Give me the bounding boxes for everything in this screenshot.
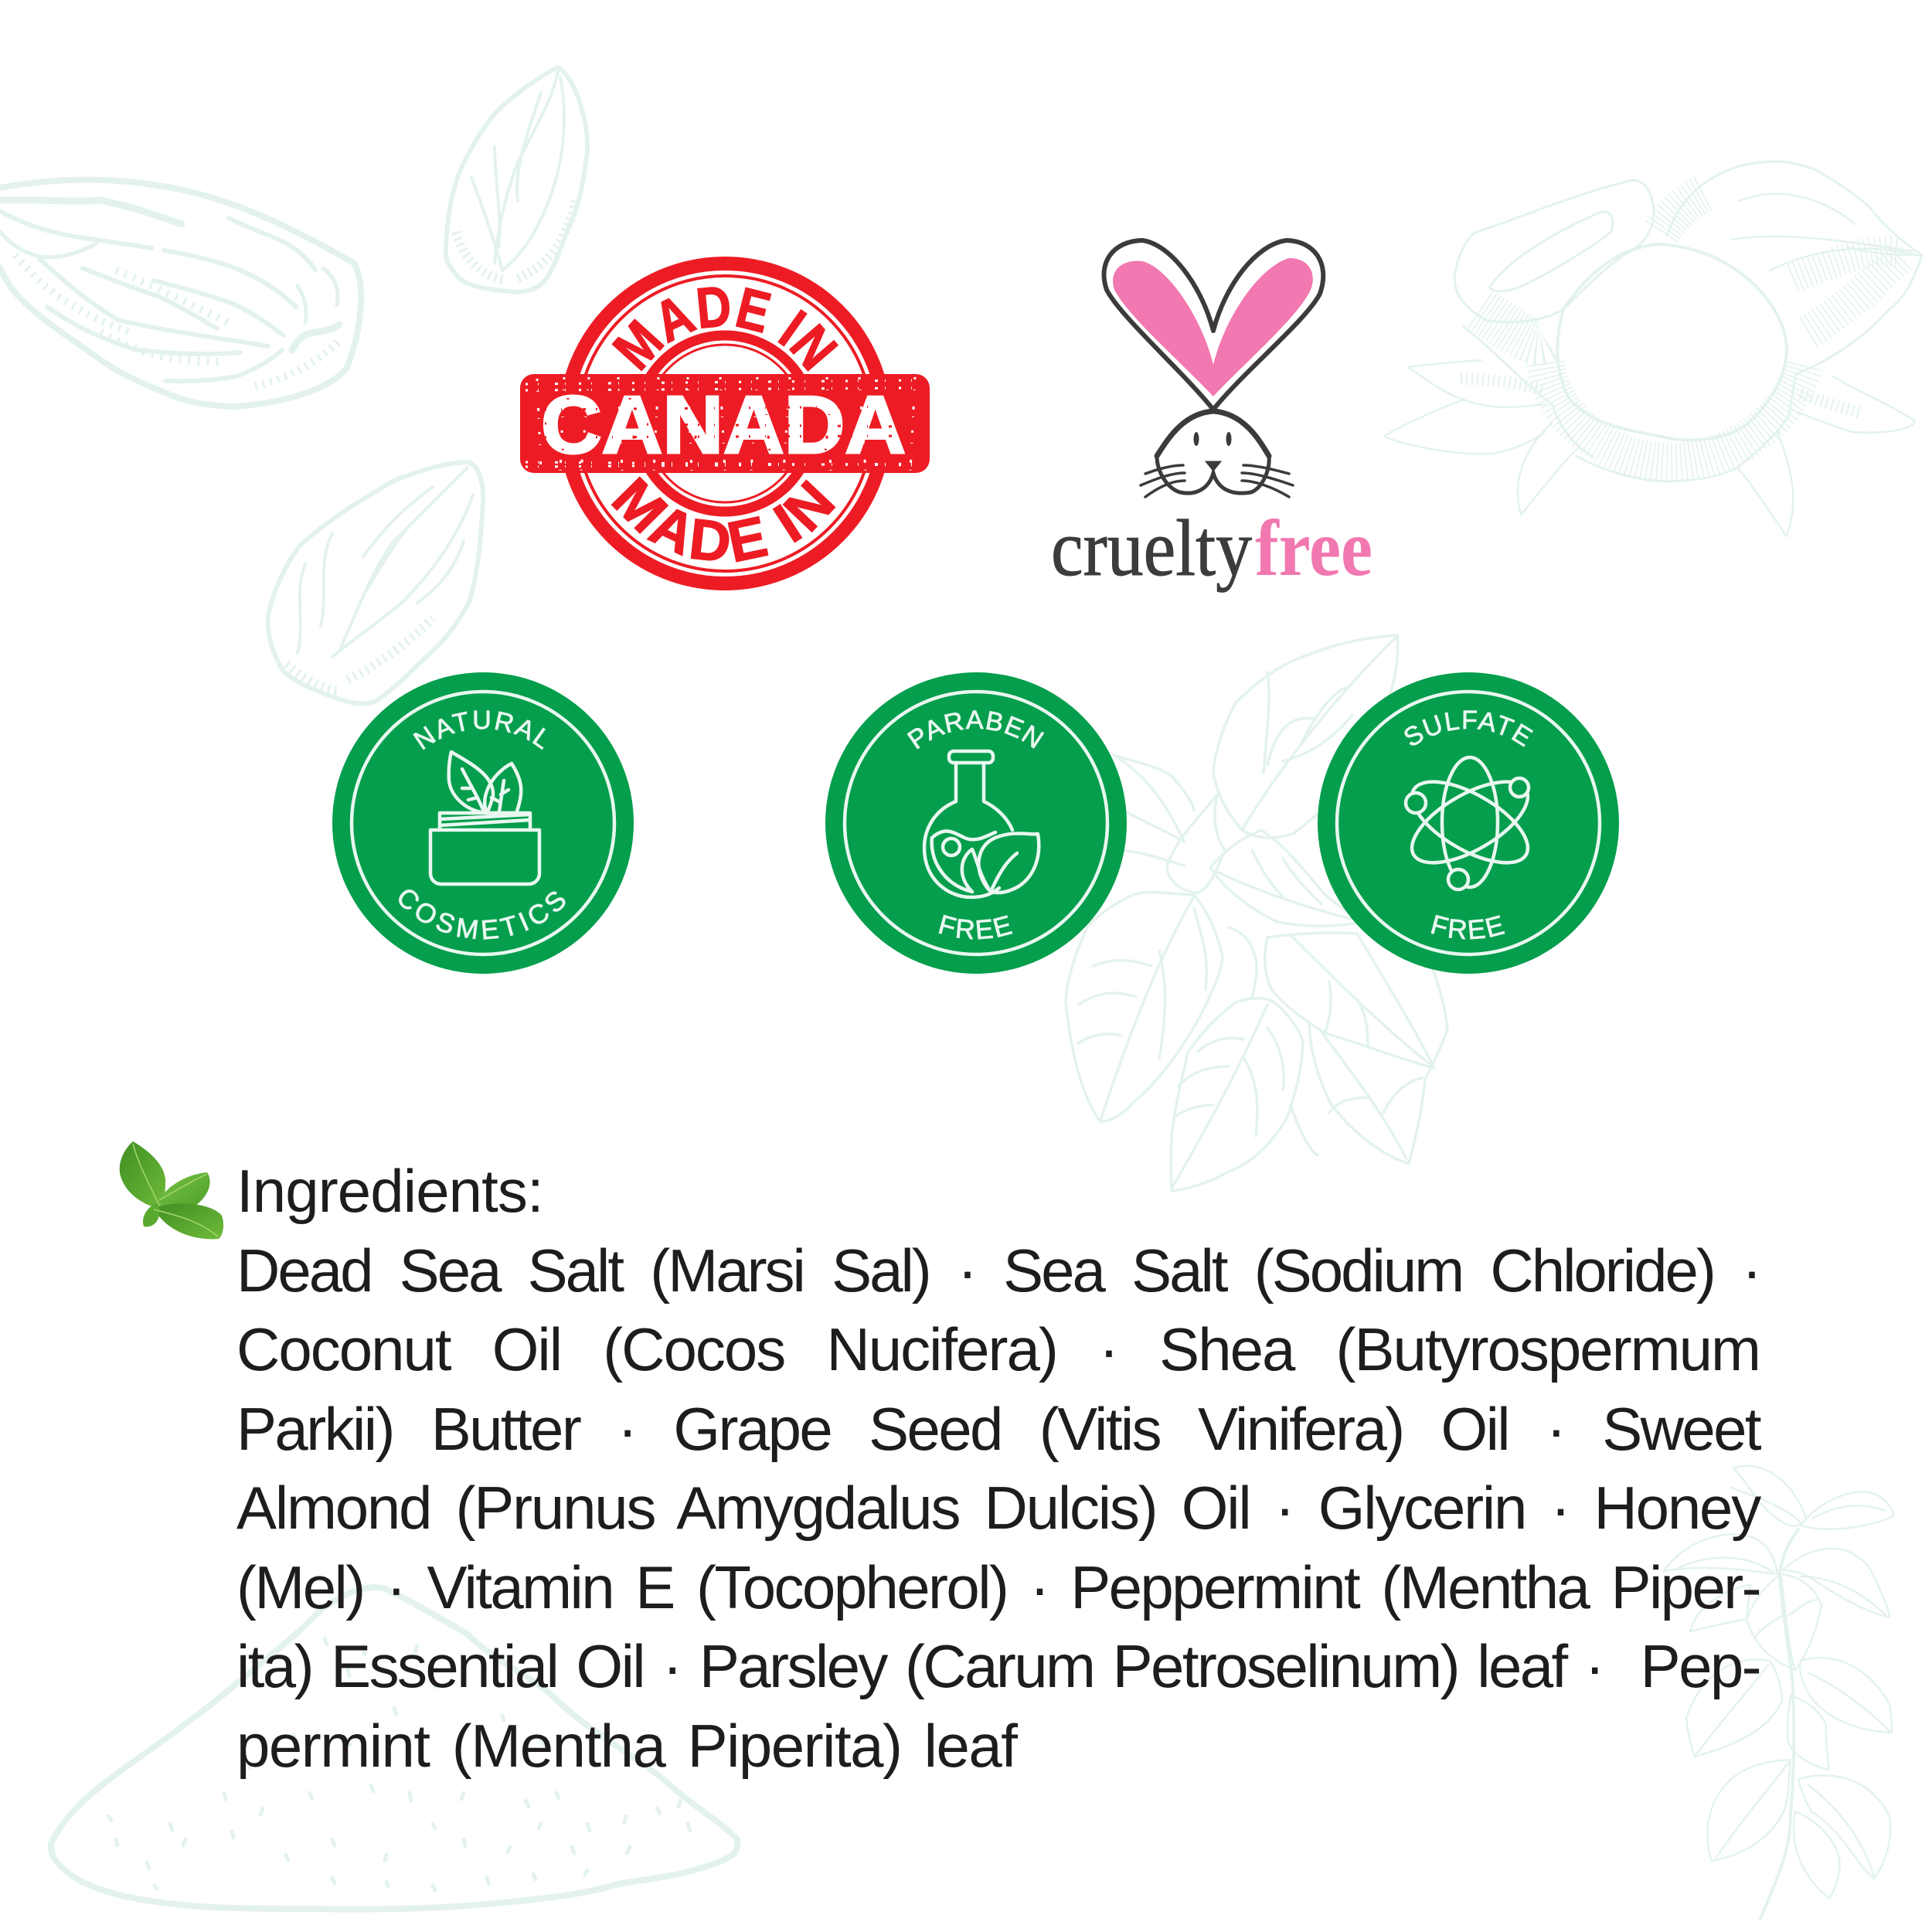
sketch: salt pile [51,1587,737,1910]
text: ingredients list [236,1157,1762,1779]
icon: cosmetic jar with leaves [430,752,539,884]
text: ingredients list: Coconut Oil (Cocos Nucifera) · Shea (Butyrospermum [236,1315,1760,1383]
text: ingredients list: Dead Sea Salt (Marsi Sal) · Sea Salt (Sodium Chloride) · [236,1236,1760,1304]
text: ingredients list: Ingredients: [236,1157,543,1225]
badge: sulfate free [1318,672,1619,974]
sketch: large almond [0,180,361,406]
badge: natural cosmetics: COSMETICS [399,889,566,940]
badge: natural cosmetics [332,672,634,974]
icon: flask with leaves [924,751,1039,897]
icon: bunny ears [1104,240,1323,410]
sketch: plant branch [1664,1466,1893,1919]
text: ingredients list: Parkii) Butter · Grape Seed (Vitis Vinifera) Oil · Sweet [236,1394,1760,1462]
text: ingredients list: Almond (Prunus Amygdalus Dulcis) Oil · Glycerin · Honey [236,1474,1760,1542]
badge: sulfate free: FREE [1431,915,1505,940]
badge: made in canada stamp: CANADA [541,379,906,471]
badge: paraben free: PARABEN [907,710,1045,750]
sketch: almond lower [268,462,483,704]
icon: fresh mint leaf [120,1141,223,1239]
text: cruelty free [1051,504,1372,593]
badge: natural cosmetics: NATURAL [413,710,546,750]
badge: made in canada stamp: MADE IN [611,476,836,563]
badge: paraben free [825,672,1127,974]
icon: bunny head [1141,411,1293,497]
badge: made in canada stamp: MADE IN [611,287,839,372]
text: ingredients list: (Mel) · Vitamin E (Tocopherol) · Peppermint (Mentha Piper- [236,1553,1760,1621]
text: ingredients list: ita) Essential Oil · Parsley (Carum Petroselinum) leaf · Pep- [236,1632,1760,1700]
icon: atom [1400,757,1540,889]
badge: paraben free: FREE [938,915,1012,940]
sketch: mint sprig [1066,635,1447,1191]
sketch: small almond top [446,67,587,292]
text: ingredients list: permint (Mentha Piperita) leaf [236,1711,1016,1779]
badge: cruelty free bunny [1051,240,1372,593]
text: cruelty free: free [1255,504,1372,593]
sketch: coconut [1384,162,1922,536]
badge: sulfate free: SULFATE [1404,710,1533,747]
badge: made in canada stamp [520,257,930,590]
text: cruelty free: cruelty [1051,504,1252,593]
